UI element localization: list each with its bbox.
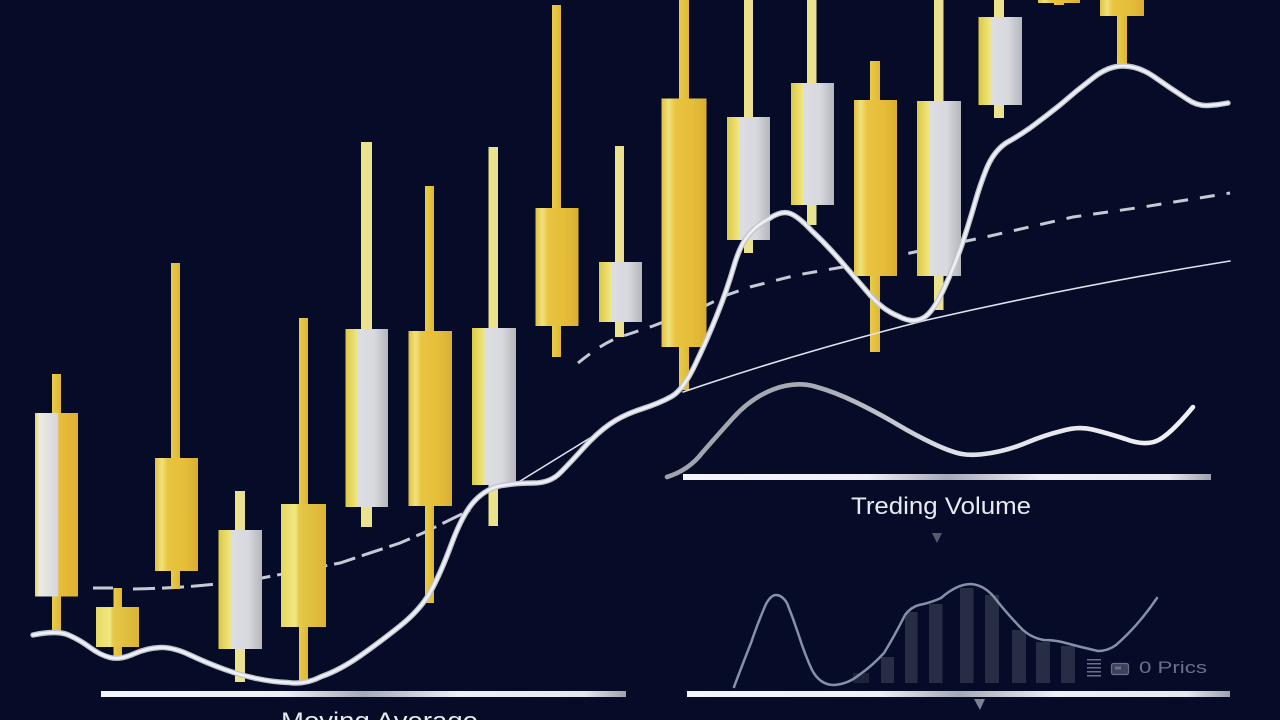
- candle 4: [218, 491, 262, 682]
- price axis bar: [687, 691, 1230, 697]
- icon: legend lines: [1087, 659, 1101, 676]
- candle 15: [917, 0, 961, 310]
- candle 13: [791, 0, 834, 225]
- volume label: Treding Volume: [851, 493, 1031, 520]
- long moving average trend lines: [93, 193, 1230, 589]
- volume axis bar: [683, 474, 1211, 480]
- candle 18: [1100, 0, 1144, 66]
- candle 17: [1038, 0, 1080, 5]
- thin moving average line: [517, 261, 1230, 483]
- candle 14: [854, 61, 897, 352]
- dashed moving average, lower section: [93, 510, 470, 589]
- panel: price histogram: [687, 584, 1230, 710]
- candle 16: [978, 0, 1022, 118]
- candle 5: [281, 318, 326, 684]
- icon: small down marker: [932, 533, 942, 543]
- candle 2: [96, 588, 139, 657]
- volume curve: [667, 384, 1193, 477]
- histogram bars: [853, 588, 1075, 683]
- candle 11: [662, 0, 706, 390]
- panel: moving average: [101, 691, 626, 720]
- candle 3: [155, 263, 198, 589]
- moving average axis bar: [101, 691, 626, 697]
- candle 7: [408, 186, 452, 603]
- candle 1: [35, 374, 78, 631]
- candle 10: [599, 146, 642, 337]
- panel: trading volume: [667, 384, 1211, 543]
- candle 12: [727, 0, 770, 253]
- icon: small marker below axis: [974, 699, 985, 710]
- candle 6: [346, 142, 388, 527]
- icon: legend card: [1112, 664, 1128, 674]
- candle 9: [536, 5, 578, 357]
- histogram curve: [734, 584, 1157, 687]
- candle 8: [472, 147, 516, 526]
- price legend label: 0 Prics: [1139, 658, 1207, 677]
- dashed moving average, upper section: [578, 193, 1230, 363]
